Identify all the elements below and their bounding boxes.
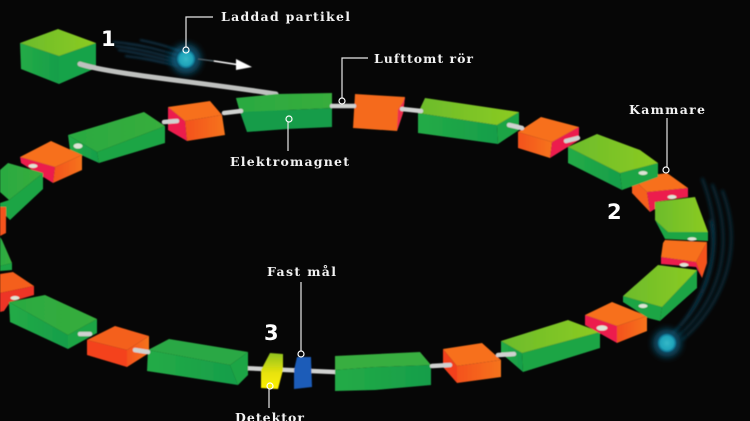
- magnet left edge: [0, 237, 12, 271]
- magnet right lower: [623, 265, 697, 321]
- magnet bottom centre: [335, 352, 431, 391]
- label: Laddad partikel: Laddad partikel: [221, 9, 350, 24]
- chamber top left: [168, 101, 225, 141]
- detector: [261, 353, 283, 389]
- magnet lower centre left: [147, 339, 248, 385]
- magnet lower left: [9, 295, 97, 349]
- chamber: Kammare: [632, 173, 688, 212]
- label: Lufttomt rör: [339, 51, 473, 104]
- chamber top centre: [353, 94, 405, 131]
- magnet left 1: [0, 163, 43, 220]
- label: Lufttomt rör: Lufttomt rör: [374, 51, 473, 66]
- injector block: [20, 29, 96, 84]
- numeral 3: 3: [264, 321, 279, 345]
- magnet upper right: [568, 134, 658, 190]
- label: Fast mål: [267, 264, 336, 357]
- numeral 2: 2: [607, 200, 622, 224]
- fixed pipe section through target: [241, 368, 335, 372]
- chamber right: [661, 240, 707, 278]
- chamber lower left: [87, 326, 149, 367]
- injector pipe: [80, 64, 276, 94]
- label: Fast mål: Fast mål: [267, 264, 336, 279]
- magnet top right: [418, 98, 519, 144]
- particle 1 with tail: [113, 40, 201, 74]
- chamber left 2: [0, 272, 34, 312]
- arrow: particle direction: [198, 59, 252, 70]
- label: Laddad partikel: [183, 9, 350, 53]
- chamber bottom right: [443, 343, 501, 383]
- label: Kammare: [629, 102, 705, 173]
- magnet right: [655, 197, 708, 241]
- chamber left edge: [0, 207, 6, 236]
- magnet bottom right: [501, 320, 600, 372]
- chamber right lower: [585, 302, 647, 343]
- numeral 1: 1: [101, 27, 116, 51]
- magnet top left: [68, 112, 165, 163]
- fixed target: [294, 357, 312, 389]
- magnet: Elektromagnet: [236, 93, 332, 132]
- label: Elektromagnet: Elektromagnet: [230, 154, 349, 169]
- particle 2 with tail: [653, 178, 731, 357]
- chamber upper right: [518, 117, 579, 158]
- chamber left 1: [20, 141, 82, 183]
- vacuum pipe connectors between segments: [10, 106, 696, 366]
- label: Detektor: [235, 383, 304, 421]
- label: Kammare: Kammare: [629, 102, 705, 117]
- label: Elektromagnet: [230, 116, 349, 169]
